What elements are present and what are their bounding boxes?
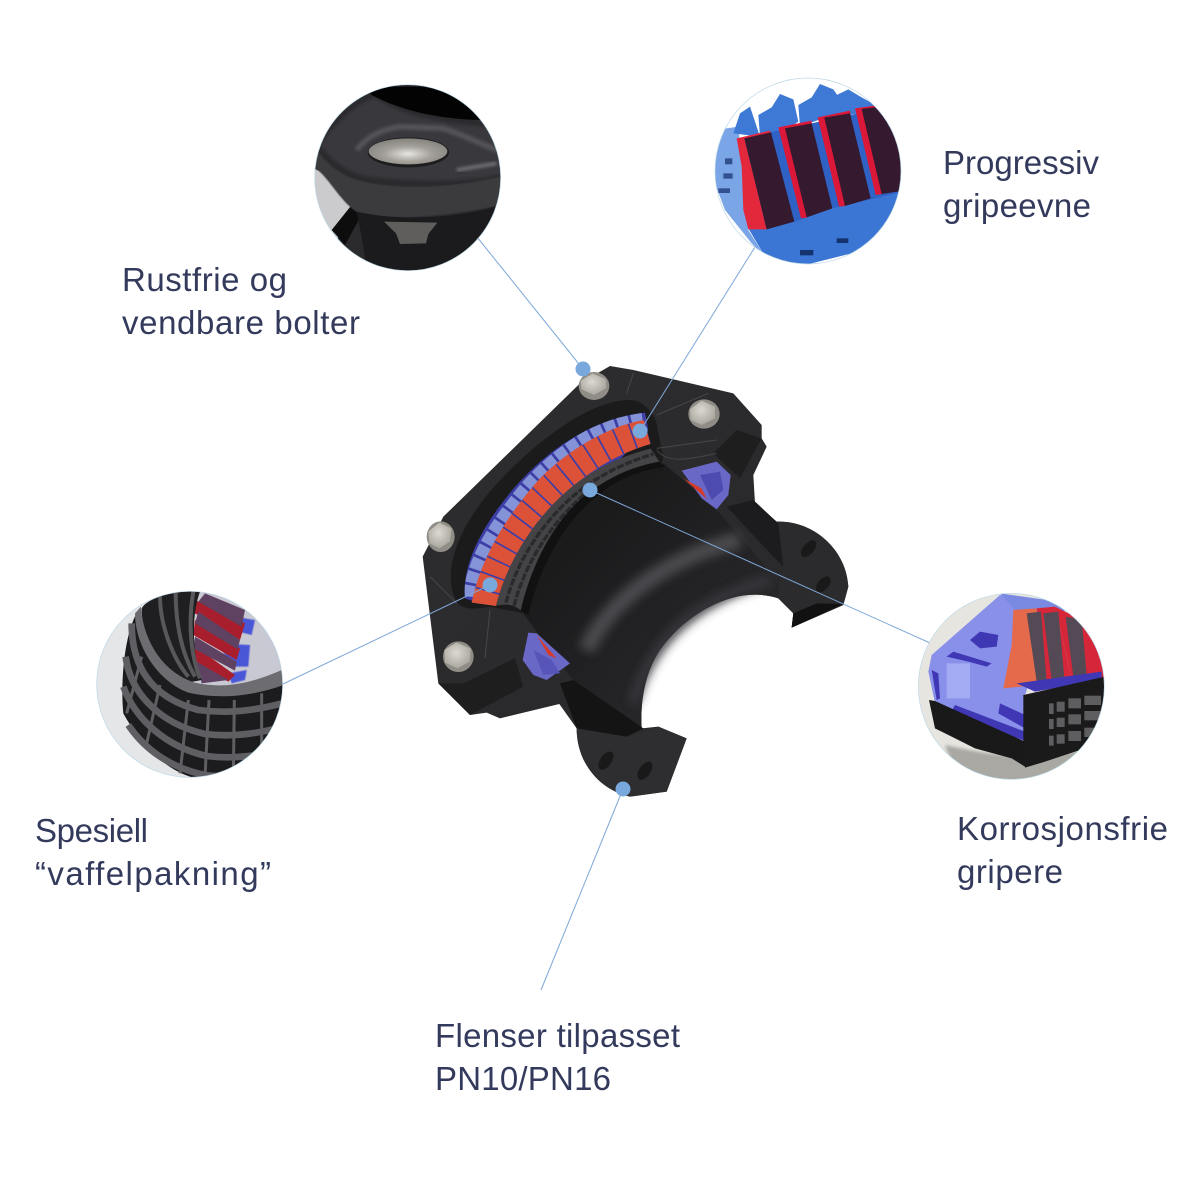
blue body behind pads bbox=[744, 114, 899, 226]
red strips bbox=[1037, 607, 1108, 685]
flange inner recess bbox=[451, 400, 663, 613]
flange dark edge right bbox=[792, 603, 843, 628]
label: flanges: PN10/PN16 bbox=[435, 1060, 611, 1097]
blue cutouts bbox=[932, 632, 1028, 742]
label: waffle gasket bbox=[35, 812, 271, 892]
nut lower bbox=[443, 641, 474, 672]
dot: bolts bbox=[576, 362, 590, 376]
floor shadow bbox=[945, 745, 1105, 782]
flange holes right bbox=[798, 538, 833, 595]
circle outline bbox=[918, 593, 1104, 779]
red wedge bbox=[737, 131, 772, 229]
hex nuts bbox=[427, 372, 720, 672]
purple ledge bbox=[1017, 672, 1102, 692]
label: flanges: Flenser tilpasset bbox=[435, 1017, 680, 1054]
nut underside bbox=[384, 222, 437, 244]
gasket ribbed body bbox=[122, 608, 285, 780]
marker dots bbox=[482, 362, 648, 796]
blue backing bbox=[464, 412, 648, 601]
flange holes lower bbox=[595, 749, 656, 782]
gasket cross ribs bbox=[127, 657, 262, 777]
bolt head bbox=[368, 137, 449, 167]
ring: red grippers bbox=[472, 420, 651, 606]
label: corrosion free grippers: gripere bbox=[957, 853, 1063, 890]
orange wedge bbox=[1003, 608, 1038, 688]
detail circle: waffle gasket bbox=[97, 590, 288, 780]
ring: waffle gasket bbox=[496, 449, 665, 615]
connector line: waffle gasket bbox=[283, 585, 490, 684]
label: bolts: vendbare bolter bbox=[122, 304, 360, 341]
lower body bbox=[357, 206, 496, 270]
label: progressive grip: gripeevne bbox=[943, 187, 1091, 224]
gasket top lip bbox=[135, 607, 283, 696]
surface sheen bbox=[357, 127, 497, 150]
blue back fins bbox=[733, 84, 878, 137]
gasket ribs bbox=[123, 623, 285, 776]
abrasive pads bbox=[1027, 612, 1087, 682]
gasket shadow bbox=[521, 462, 665, 615]
circle outline bbox=[715, 78, 901, 264]
barrel highlight band bbox=[587, 540, 740, 650]
red gripper band bbox=[472, 420, 651, 606]
label: waffle gasket: “vaffelpakning” bbox=[35, 855, 271, 892]
inner pipe barrel bbox=[521, 463, 780, 728]
ridge facets bbox=[430, 373, 717, 658]
dot: flange bbox=[616, 782, 630, 796]
dot: grippers bbox=[582, 482, 598, 498]
blue teeth bbox=[469, 417, 645, 597]
flange ear shading lower bbox=[577, 727, 687, 797]
gasket end face bbox=[1023, 677, 1105, 768]
gasket band bbox=[496, 449, 659, 611]
pale backdrop right bbox=[195, 592, 281, 686]
nut right bbox=[688, 399, 720, 429]
label: bolts bbox=[122, 261, 360, 341]
sheen right bbox=[457, 163, 497, 170]
label: corrosion free grippers bbox=[957, 810, 1168, 890]
connector line: gripping bbox=[640, 247, 755, 431]
connector line: bolts bbox=[477, 237, 583, 369]
edge of flange bbox=[313, 150, 507, 218]
dark strap bbox=[332, 206, 358, 245]
black gasket base bbox=[929, 700, 1025, 767]
rib lower bbox=[560, 680, 643, 737]
abrasive pads bbox=[744, 105, 908, 229]
label: bolts: Rustfrie og bbox=[122, 261, 287, 298]
gasket upper ribbed back bbox=[142, 591, 202, 683]
front block shadow lower left bbox=[438, 658, 523, 715]
upper ribs bbox=[160, 592, 200, 678]
base recess marks bbox=[800, 238, 848, 255]
nut top bbox=[579, 372, 609, 400]
blue base teeth bbox=[748, 192, 902, 267]
connector line: corrosion free grippers bbox=[590, 490, 930, 643]
circle outline bbox=[97, 591, 283, 777]
label: waffle gasket: Spesiell bbox=[35, 812, 148, 849]
lit surface bbox=[320, 98, 503, 180]
barrel rim highlight bbox=[633, 580, 770, 703]
coupling body silhouette bbox=[423, 366, 848, 797]
product: cutaway flange coupling bbox=[423, 366, 848, 797]
connector line: flanges bbox=[541, 789, 623, 990]
red segment gaps bbox=[483, 432, 648, 607]
nut left bbox=[427, 521, 455, 552]
detail circle: corrosion free grippers bbox=[918, 593, 1108, 782]
gripper section lower bbox=[523, 633, 570, 680]
label: progressive grip bbox=[943, 144, 1100, 224]
light grey backdrop bbox=[315, 169, 350, 238]
abrasive pads bbox=[193, 593, 245, 683]
label: corrosion free grippers: Korrosjonsfrie bbox=[957, 810, 1168, 847]
blue gripper body bbox=[928, 595, 1055, 742]
label: flanges bbox=[435, 1017, 680, 1097]
raised block bbox=[947, 663, 970, 698]
gasket waffle row inner bbox=[514, 491, 589, 606]
blue tabs bbox=[222, 618, 256, 684]
gasket waffle row outer bbox=[506, 454, 653, 603]
flange ear shading right bbox=[777, 522, 848, 628]
circle outline bbox=[315, 85, 501, 271]
rib right bbox=[727, 500, 783, 567]
ring: blue gripper backing bbox=[464, 412, 648, 601]
dot: gripping bbox=[632, 424, 648, 438]
front block shadow upper right bbox=[713, 430, 762, 478]
gasket holes bbox=[1049, 696, 1101, 746]
red segments bbox=[193, 600, 245, 682]
detail circle: stainless bolt bbox=[310, 80, 507, 277]
gripper section right bbox=[682, 462, 731, 509]
left holes bbox=[718, 158, 733, 193]
red strips bbox=[778, 103, 892, 218]
back blue strip bbox=[1000, 593, 1065, 612]
label: progressive grip: Progressiv bbox=[943, 144, 1100, 181]
left light blue side bbox=[715, 127, 765, 257]
bolt head face bbox=[369, 138, 447, 164]
black background top bbox=[363, 87, 487, 120]
dot: gasket bbox=[482, 578, 498, 592]
detail circle: progressive grip bbox=[715, 78, 908, 267]
